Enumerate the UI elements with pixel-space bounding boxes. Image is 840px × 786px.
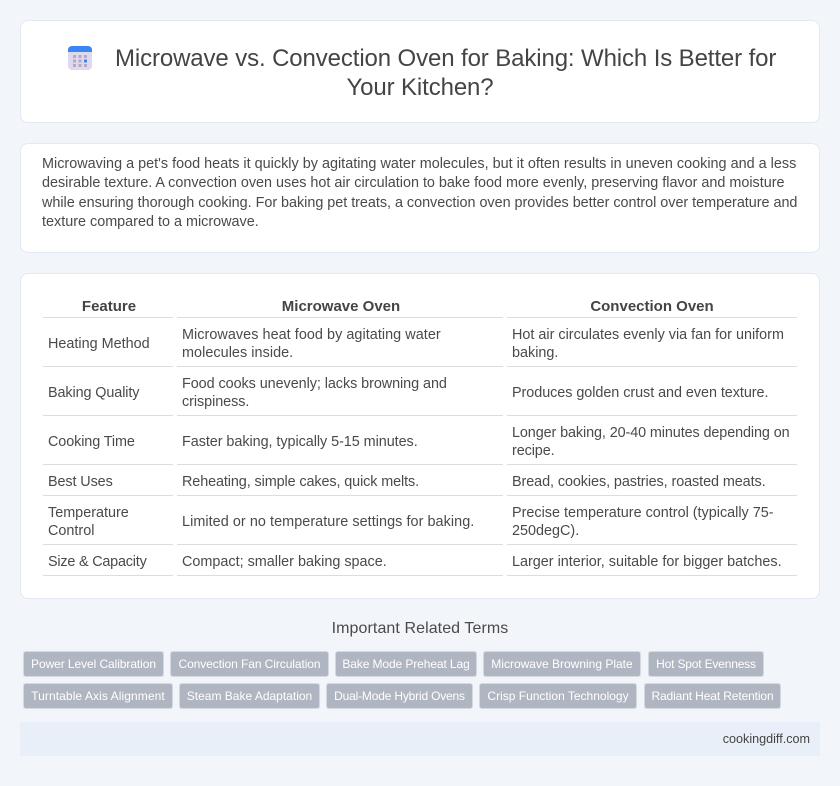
related terms heading: Important Related Terms <box>332 620 508 637</box>
row: cooking time: recipe. <box>512 443 554 459</box>
related terms tags: Crisp Function Technology <box>487 689 629 703</box>
intro panel <box>20 143 820 253</box>
row: cooking time: Cooking Time <box>48 434 135 450</box>
row: baking quality: Produces golden crust and even texture. <box>512 385 768 401</box>
intro text: Microwaving a pet's food heats it quickly by agitating water molecules, but it often results in uneven cooking and a less <box>42 156 796 172</box>
row: size and capacity <box>48 554 782 570</box>
related terms tags: Convection Fan Circulation <box>178 657 320 671</box>
table header: Feature <box>82 298 136 315</box>
row: best uses: Reheating, simple cakes, quick melts. <box>182 474 419 490</box>
row: cooking time: Faster baking, typically 5-15 minutes. <box>182 434 418 450</box>
row: best uses: Bread, cookies, pastries, roasted meats. <box>512 474 766 490</box>
row: size and capacity: Size & Capacity <box>48 554 147 570</box>
row: size and capacity: Larger interior, suitable for bigger batches. <box>512 554 782 570</box>
row: temperature control <box>48 505 774 539</box>
row: cooking time: Longer baking, 20-40 minutes depending on <box>512 425 790 441</box>
related terms tags: Dual-Mode Hybrid Ovens <box>334 689 465 703</box>
title: Your Kitchen? <box>346 74 494 101</box>
header card <box>20 20 820 123</box>
row: temperature control: Control <box>48 523 94 539</box>
related terms tags: Bake Mode Preheat Lag <box>342 657 470 671</box>
related terms tags: Hot Spot Evenness <box>656 657 756 671</box>
footer bar <box>20 722 820 756</box>
row: heating method: Microwaves heat food by agitating water <box>182 327 441 343</box>
row: heating method: baking. <box>512 345 558 361</box>
table header <box>82 298 714 315</box>
row: cooking time <box>48 425 790 459</box>
row: temperature control: Precise temperature control (typically 75- <box>512 505 774 521</box>
related terms tags <box>23 651 781 709</box>
intro text: texture compared to a microwave. <box>42 214 259 230</box>
row: size and capacity: Compact; smaller baking space. <box>182 554 387 570</box>
row: baking quality: Food cooks unevenly; lacks browning and <box>182 376 447 392</box>
title <box>115 45 776 101</box>
related terms tags: Radiant Heat Retention <box>651 689 774 703</box>
intro text <box>42 156 797 230</box>
icon: calendar <box>68 46 92 70</box>
row: heating method <box>48 327 784 361</box>
row: heating method: molecules inside. <box>182 345 293 361</box>
comparison table panel <box>20 273 820 599</box>
related terms tags: Steam Bake Adaptation <box>187 689 312 703</box>
row: temperature control: 250degC). <box>512 523 579 539</box>
row: baking quality: crispiness. <box>182 394 249 410</box>
related terms tags: Power Level Calibration <box>31 657 156 671</box>
intro text: desirable texture. A convection oven uses hot air circulation to bake food more evenly, preserving flavor and moisture <box>42 175 784 191</box>
footer source text: cookingdiff.com <box>723 732 810 746</box>
row: best uses <box>48 474 766 490</box>
table header: Microwave Oven <box>282 298 400 315</box>
row: temperature control: Temperature <box>48 505 129 521</box>
row: heating method: Hot air circulates evenly via fan for uniform <box>512 327 784 343</box>
title: Microwave vs. Convection Oven for Baking: Which Is Better for <box>115 45 776 72</box>
related terms tags: Turntable Axis Alignment <box>31 689 165 703</box>
table header: Convection Oven <box>590 298 714 315</box>
row: temperature control: Limited or no temperature settings for baking. <box>182 514 474 530</box>
related terms tags: Microwave Browning Plate <box>491 657 633 671</box>
row: best uses: Best Uses <box>48 474 113 490</box>
intro text: while ensuring thorough cooking. For baking pet treats, a convection oven provides better control over temperature and <box>42 194 797 210</box>
row: baking quality: Baking Quality <box>48 385 139 401</box>
row: baking quality <box>48 376 768 410</box>
row: heating method: Heating Method <box>48 336 150 352</box>
